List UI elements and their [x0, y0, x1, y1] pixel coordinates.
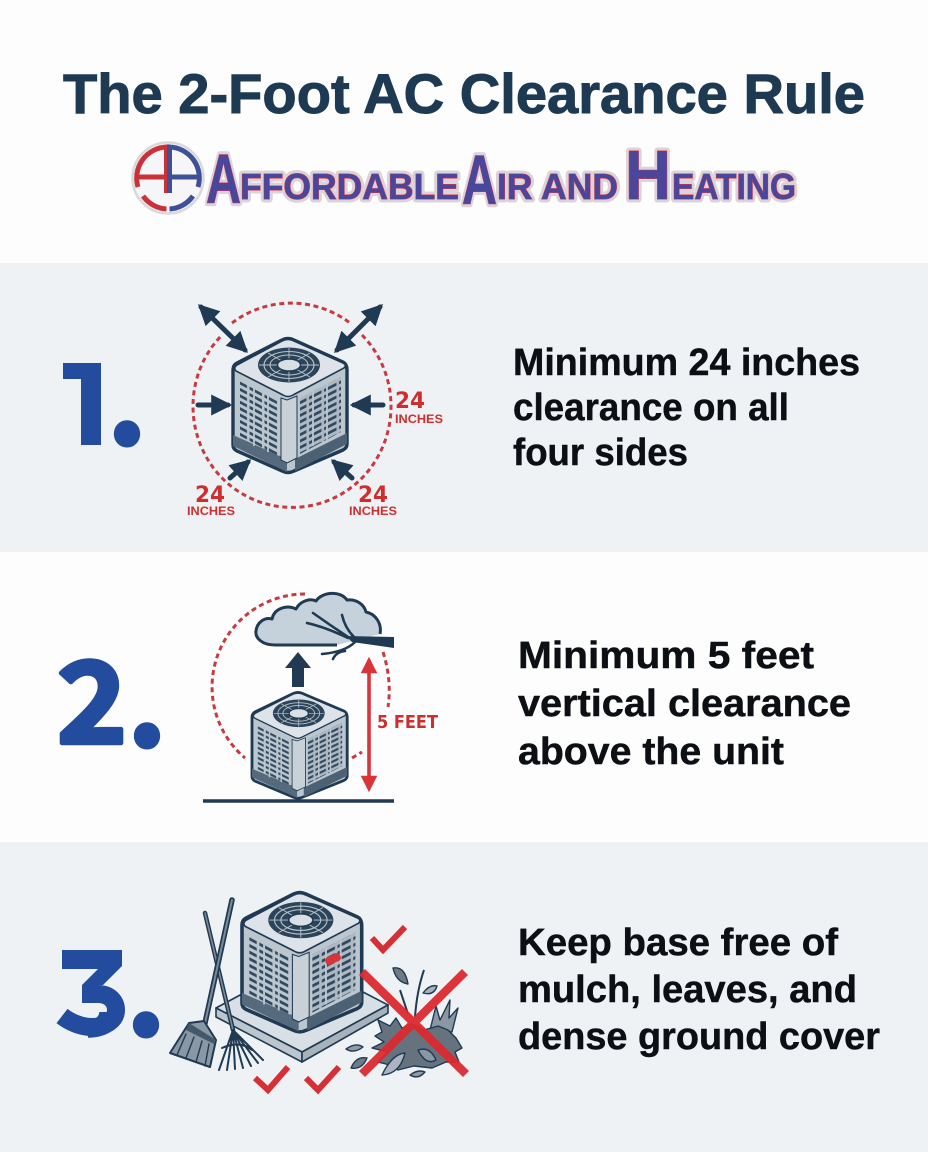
dashed clearance arc	[212, 594, 389, 758]
logo wordmark: IR AND	[497, 166, 618, 207]
number 2: 2	[57, 614, 127, 776]
icon: AC unit	[242, 893, 362, 1032]
panel: rule 3	[0, 842, 928, 1152]
rule 2 text	[518, 635, 851, 773]
logo: Affordable Air and Heating	[132, 136, 796, 219]
clearance arrows	[198, 307, 383, 478]
diagram: vertical clearance	[203, 593, 439, 801]
icon: cloud and branch	[256, 593, 394, 659]
ground line	[203, 799, 394, 803]
title: The 2-Foot AC Clearance Rule	[63, 62, 865, 125]
logo wordmark: EATING	[672, 166, 796, 207]
number 3: 3	[56, 905, 126, 1067]
rule 1 text: four sides	[513, 432, 688, 474]
icon: AC unit	[252, 692, 347, 798]
rule 2 text: vertical clearance	[518, 683, 851, 725]
label: 24 inches bottom right	[349, 483, 397, 518]
number 2	[57, 614, 163, 776]
logo wordmark: A	[462, 141, 497, 219]
label: 24 inches bottom left	[187, 483, 235, 518]
icon: rake	[205, 913, 263, 1070]
rule 1 text: Minimum 24 inches	[513, 342, 860, 384]
label: 24 inches right: INCHES	[395, 414, 443, 426]
rule 1 text: clearance on all	[513, 387, 789, 429]
rule 2 text: above the unit	[518, 731, 784, 773]
number 1: .	[111, 326, 143, 471]
label: 24 inches bottom left: INCHES	[187, 506, 235, 518]
red dimension arrow	[367, 660, 371, 789]
icon: leaves and ground cover	[346, 968, 462, 1077]
logo wordmark: A	[462, 141, 497, 219]
logo wordmark: IR AND	[497, 166, 618, 207]
logo wordmark: EATING	[672, 166, 796, 207]
label: 24 inches bottom left: 24	[195, 483, 225, 508]
number 1	[63, 363, 140, 448]
concrete pad	[216, 992, 388, 1062]
logo wordmark	[206, 136, 796, 219]
logo emblem	[132, 142, 204, 214]
checkmarks	[255, 927, 405, 1090]
logo wordmark: A	[206, 140, 241, 218]
rule 3 text: Keep base free of	[518, 922, 838, 964]
logo wordmark: H	[625, 136, 671, 214]
logo wordmark: FFORDABLE	[240, 166, 459, 207]
number 1: 1	[65, 315, 105, 477]
red X	[362, 972, 466, 1074]
dashed clearance circle	[193, 303, 391, 507]
number 3: .	[130, 917, 162, 1062]
rule 2 text: Minimum 5 feet	[518, 635, 814, 677]
rule 3 text: mulch, leaves, and	[518, 969, 857, 1011]
panel: rule 1	[0, 263, 928, 552]
rule 3 text	[518, 922, 880, 1058]
logo wordmark: H	[625, 136, 671, 214]
label: 24 inches bottom right: 24	[358, 483, 388, 508]
icon: broom	[170, 900, 232, 1067]
label: 24 inches right	[395, 389, 443, 426]
logo wordmark: FFORDABLE	[240, 166, 459, 207]
label: 5 feet: 5 FEET	[377, 712, 439, 733]
label: 24 inches bottom right: INCHES	[349, 506, 397, 518]
icon: AC unit	[233, 338, 347, 472]
indicator light	[324, 952, 342, 966]
label: 24 inches right: 24	[395, 389, 425, 414]
panel: rule 2	[0, 552, 928, 842]
number 2: .	[131, 628, 163, 773]
logo wordmark: A	[206, 140, 241, 218]
rule 1 text	[513, 342, 860, 474]
diagram: keep base clear	[170, 893, 466, 1090]
number 3	[56, 950, 160, 1038]
arrow: upward	[285, 652, 311, 687]
diagram: four-side clearance	[187, 303, 443, 518]
rule 3 text: dense ground cover	[518, 1016, 880, 1058]
